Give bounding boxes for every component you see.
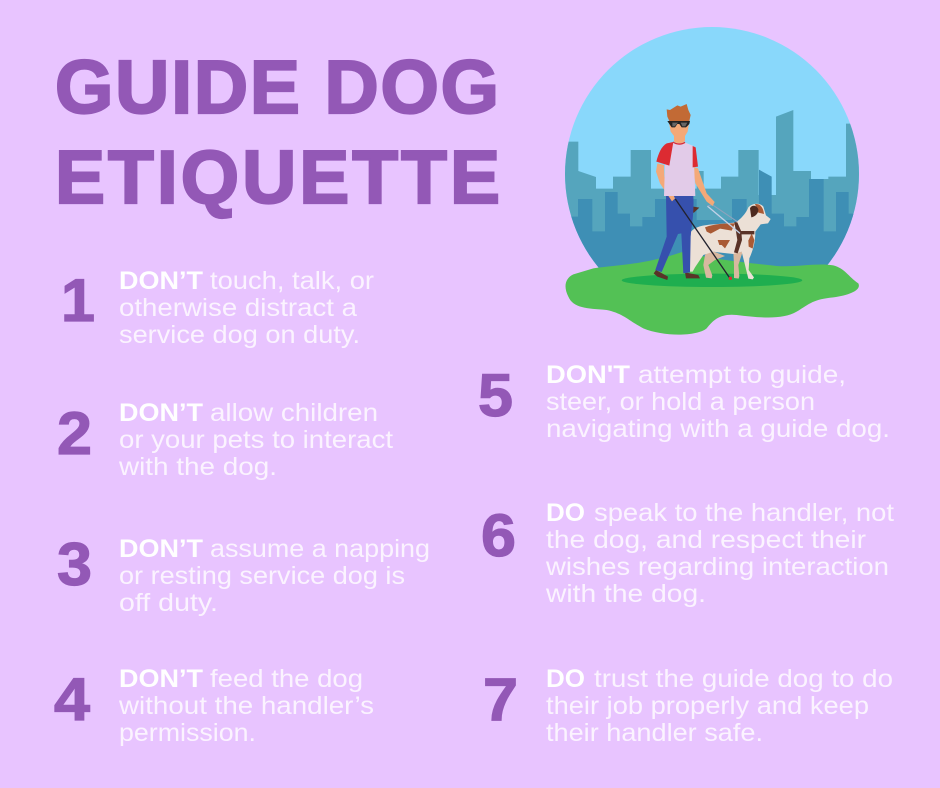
number 2: 2 <box>57 400 92 467</box>
grass <box>566 252 859 335</box>
tip 2: DON’T <box>119 399 203 427</box>
tip 5: navigating with a guide dog. <box>546 415 890 443</box>
number 3: 3 <box>57 531 92 598</box>
cane <box>675 199 732 280</box>
number 6: 6 <box>481 502 516 569</box>
title <box>55 45 500 219</box>
tip 2: or your pets to interact <box>119 426 393 454</box>
tip 7: DO <box>546 665 585 693</box>
number 5: 5 <box>478 362 513 429</box>
tip 4: without the handler’s <box>118 692 374 720</box>
number 1: 1 <box>61 267 95 334</box>
city scene circle <box>563 25 863 283</box>
dog <box>689 204 771 279</box>
tip 3: off duty. <box>119 589 218 617</box>
tip 4: feed the dog <box>210 665 363 693</box>
title: ETIQUETTE <box>55 135 500 219</box>
tip 4: permission. <box>119 719 256 747</box>
number 4: 4 <box>54 666 91 733</box>
tip 3: assume a napping <box>210 535 430 563</box>
tip 7: their handler safe. <box>546 719 763 747</box>
head <box>667 104 691 144</box>
man <box>654 104 715 280</box>
tip 7: trust the guide dog to do <box>594 665 893 693</box>
tip 5: DON'T <box>546 361 630 389</box>
tip 6: wishes regarding interaction <box>545 553 889 581</box>
illustration: man walking with guide dog <box>563 25 863 335</box>
tip 3: DON’T <box>119 535 203 563</box>
tip 1: touch, talk, or <box>210 267 374 295</box>
tip 2: with the dog. <box>118 453 277 481</box>
grass shadow <box>622 274 802 287</box>
title: GUIDE DOG <box>55 45 499 129</box>
tip 4: DON’T <box>119 665 203 693</box>
number 7: 7 <box>483 666 518 733</box>
tip 1: service dog on duty. <box>119 321 360 349</box>
tip 1: otherwise distract a <box>119 294 357 322</box>
tip 6: the dog, and respect their <box>546 526 866 554</box>
tip 6: with the dog. <box>545 580 706 608</box>
tip 5: steer, or hold a person <box>546 388 815 416</box>
tip 6: speak to the handler, not <box>594 499 894 527</box>
tip 2: allow children <box>210 399 378 427</box>
tip 1: DON’T <box>119 267 203 295</box>
tip 3: or resting service dog is <box>119 562 405 590</box>
tip 5: attempt to guide, <box>638 361 846 389</box>
tip 7: their job properly and keep <box>546 692 869 720</box>
tip 6: DO <box>546 499 585 527</box>
